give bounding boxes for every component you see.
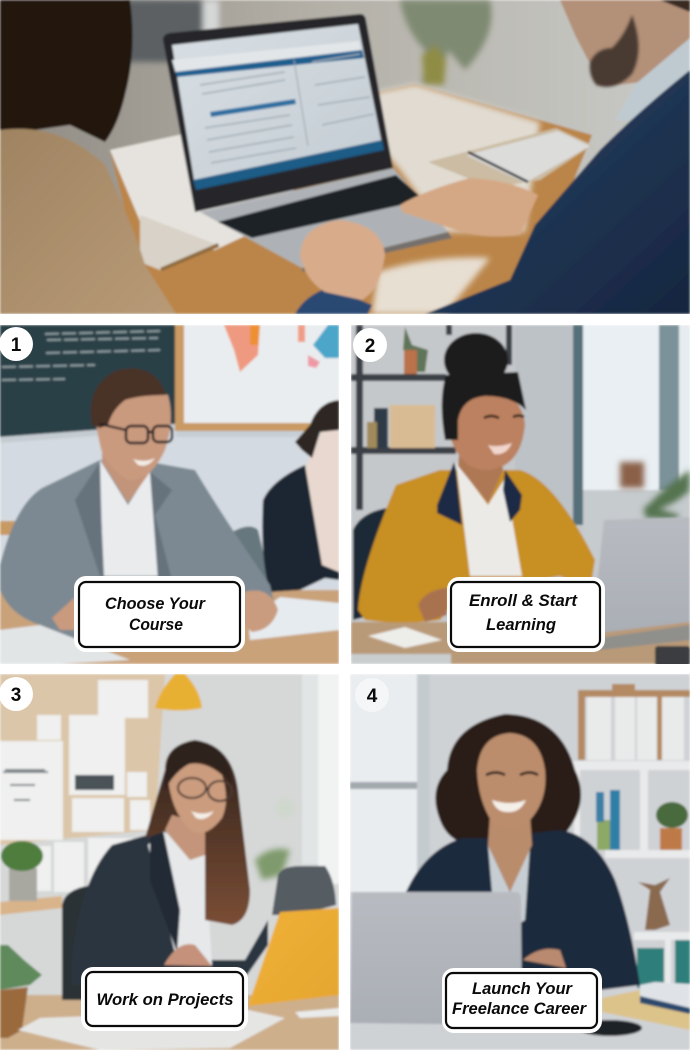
man: navy blazer [425,70,690,314]
pinboard coloured notes [224,325,339,372]
step number badge 2 [353,328,387,362]
teal boxes [637,940,690,988]
laptop screen [172,24,384,190]
woman: hair [0,0,133,142]
trackpad front [302,232,452,272]
hero photo scene [0,0,690,314]
lower wall under window [583,490,690,570]
man: glasses [100,424,172,443]
step number badge 2: 2 [365,336,375,357]
man: left hand [52,597,80,630]
office wall [36,0,638,208]
man: shirt collar [615,38,690,122]
corkboard [0,674,165,845]
man: right hand [400,178,538,236]
wooden ornament [638,878,670,930]
desk cream left area [109,133,294,252]
step label: enroll and start learning: Learning [486,615,557,634]
desk [351,622,690,664]
step number badge 1: 1 [11,335,22,356]
step label: work on projects: Work on Projects [96,990,234,1009]
desk [0,995,339,1050]
shelf units [351,325,512,510]
wall plant [255,798,295,880]
step label: choose your course [74,576,245,652]
paper card [368,627,442,648]
woman: navy lapels [437,462,522,525]
chalkboard [0,325,175,443]
window strip [302,674,339,884]
woman right: shirt and skin [305,425,339,578]
shelf plant [403,327,428,374]
step number badge 4: 4 [367,686,378,707]
step label: choose your course: Course [129,615,183,634]
man: shirt [100,460,158,576]
woman: face [168,764,226,833]
step 1 photo scene [0,325,339,664]
pinned papers [0,680,150,892]
woman: hair bun [444,333,508,387]
man: neck skin [560,0,690,86]
man: blazer [0,460,278,640]
man: head [96,390,171,480]
front paper [351,654,451,664]
woman: hand [523,949,566,968]
woman: lapel [150,830,180,952]
paper scribbles [3,770,48,800]
woman: smile and eyes [484,416,524,454]
panel: step 3 work on projects [0,674,339,1050]
dark mouse mat [578,1020,642,1036]
woman: blazer [358,470,595,622]
woman: shirt [456,462,522,576]
man: neck [102,445,150,503]
desk [0,590,339,664]
office wall [0,674,339,1050]
man: hair [91,368,166,428]
woman: blazer [0,129,176,314]
woman: face [447,390,525,470]
potted plant [400,0,492,85]
step label: launch your freelance career: Freelance Career [452,999,587,1018]
wooden shelf back [578,684,690,760]
office wall [350,674,690,1050]
woman: smile [191,811,214,819]
man: right hand [244,590,278,632]
man: hair corner [660,0,690,12]
woman right: hair [295,400,339,458]
step label: enroll and start learning [447,577,605,652]
laptop lid [163,14,393,212]
window curtains [573,325,690,525]
desk paper right [295,1008,339,1018]
woman: back hair [145,740,250,925]
woman: blazer [406,830,640,1000]
woman: hand [418,588,447,622]
desk plant [0,945,42,1038]
window [583,325,661,490]
step number badge 3: 3 [11,685,21,706]
yellow laptop [248,908,339,1006]
woman: neck [165,815,205,860]
step 2 photo scene [351,325,690,666]
woman: blazer [72,830,268,985]
open notebook left [0,625,130,664]
step 3 photo scene [0,674,339,1050]
paper dark block [75,775,114,790]
laptop base [200,168,448,268]
step number badge 4 [355,678,389,712]
small notebook on desk [140,215,218,270]
step label: launch your freelance career: Launch Your [472,979,573,998]
phone [655,646,690,666]
step label: launch your freelance career [442,968,602,1033]
woman: neck [458,440,503,503]
woman right: blazer [262,465,339,592]
woman: glasses [178,778,232,801]
shelf potted plant [656,802,688,850]
window plants [620,462,690,520]
shelf with plant [0,841,62,915]
panel: step 2 enroll and start learning [351,325,690,666]
white shelving [572,761,690,988]
step 4 photo scene [350,674,690,1050]
side shelf [0,521,18,535]
woman: neck [488,815,532,892]
woman: eyes [486,772,538,775]
step label: choose your course: Choose Your [105,594,206,613]
woman: shirt [148,830,212,965]
notebook and pen [428,128,592,188]
man: smile [133,458,155,466]
step label: enroll and start learning: Enroll & Start [469,591,578,610]
shelf books [596,790,620,850]
man: lapels [75,462,172,580]
desk glare [372,258,490,314]
desk [350,1025,690,1050]
man: near sleeve cuff [295,287,372,314]
desk mat [18,1010,285,1050]
step number badge 1 [0,327,33,361]
keyboard [218,175,424,238]
office wall [351,325,690,664]
man: left hand [300,220,385,300]
woman: face [477,733,545,828]
step number badge 3 [0,677,33,711]
step label: work on projects [81,967,248,1031]
book stack [602,982,690,1030]
chair right [272,866,336,915]
woman: hair [435,714,581,848]
woman: hair top [165,741,232,790]
panel: step 4 launch your freelance career [350,674,690,1050]
woman: hand [164,944,212,966]
desk cream right area [378,82,544,236]
shelf binders [367,405,435,448]
woman: hair [442,372,526,440]
notebook on desk [248,597,339,640]
window [350,674,430,892]
panel: hero photo of two people at a laptop [0,0,690,314]
woman: smile [492,800,526,812]
classroom wall [0,430,339,591]
laptop [350,892,522,1025]
pinboard [175,325,339,437]
laptop [592,517,690,650]
chair left [62,885,94,1000]
woman: shirt [488,845,530,930]
desk wood base [110,84,592,314]
wall section right of shelves [515,325,575,595]
chair [353,507,395,620]
pendant lamp [155,674,202,710]
chair behind [232,525,269,581]
window frame [125,0,219,62]
panel: step 1 choose your course [0,325,339,664]
man: beard [590,15,638,87]
white binders [587,697,684,760]
